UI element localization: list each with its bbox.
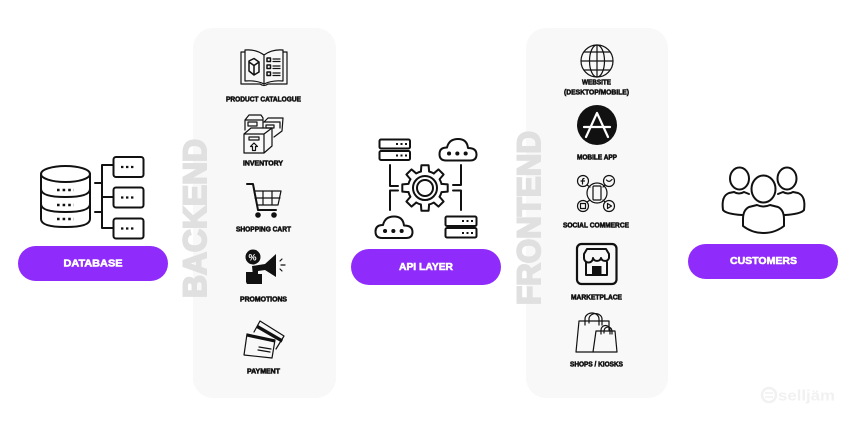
item: shopping cart xyxy=(236,184,292,234)
icon: group of three people xyxy=(723,168,804,233)
button: database: DATABASE xyxy=(64,258,123,270)
logo: selljam watermark: selljäm xyxy=(778,388,835,404)
customers group xyxy=(688,168,838,279)
item: marketplace xyxy=(571,244,622,302)
item: product catalogue xyxy=(226,50,301,104)
button: api layer xyxy=(351,249,501,285)
panel background: backend xyxy=(193,28,336,398)
icon: shopping cart xyxy=(247,184,281,218)
icon: phone with social network badges xyxy=(578,176,614,212)
icon: app store badge xyxy=(577,105,617,145)
button: customers xyxy=(688,244,838,279)
button: api layer: API LAYER xyxy=(399,262,454,273)
item: shops / kiosks xyxy=(570,313,623,368)
label: payment: PAYMENT xyxy=(247,368,281,376)
icon: shopping bags xyxy=(576,313,617,352)
icon: gear with servers and clouds xyxy=(376,139,476,238)
label: shopping cart: SHOPPING CART xyxy=(236,226,292,234)
label: shops / kiosks: SHOPS / KIOSKS xyxy=(570,362,623,368)
panel: backend xyxy=(177,28,336,398)
icon: stacked boxes xyxy=(244,115,283,153)
button: customers: CUSTOMERS xyxy=(730,256,797,267)
icon: central gear xyxy=(402,165,448,211)
panel background: frontend xyxy=(526,28,668,398)
heading: FRONTEND: FRONTEND xyxy=(511,131,547,305)
label: marketplace: MARKETPLACE xyxy=(571,294,622,302)
panel: frontend xyxy=(511,28,668,398)
button: database xyxy=(18,246,168,281)
connector lines xyxy=(390,165,461,210)
label: website: WEBSITE xyxy=(582,80,611,86)
label: promotions: PROMOTIONS xyxy=(240,296,287,304)
label: desktop/mobile: (DESKTOP/MOBILE) xyxy=(564,90,629,96)
icon: open catalogue book xyxy=(241,50,287,86)
item: inventory xyxy=(243,115,283,168)
icon: credit cards xyxy=(244,321,284,358)
api layer group xyxy=(351,139,501,285)
item: mobile app xyxy=(577,105,617,162)
heading: BACKEND: BACKEND xyxy=(177,139,213,298)
icon: cloud top right xyxy=(440,139,476,160)
item: social commerce xyxy=(563,176,629,230)
icon: storefront xyxy=(577,244,616,284)
item: promotions xyxy=(240,250,287,304)
icon: globe xyxy=(581,45,613,77)
icon: server bottom right xyxy=(446,216,476,238)
label: inventory: INVENTORY xyxy=(243,160,283,168)
label: mobile app: MOBILE APP xyxy=(577,154,617,162)
label: social commerce: SOCIAL COMMERCE xyxy=(563,222,629,230)
icon: cloud bottom left xyxy=(376,216,412,238)
logo: selljam watermark xyxy=(762,388,835,404)
item: website xyxy=(564,45,629,96)
item: payment xyxy=(244,321,284,376)
label: product catalogue: PRODUCT CATALOGUE xyxy=(226,96,301,104)
icon: server top left xyxy=(380,140,410,160)
database group xyxy=(18,157,168,281)
icon: database with linked records xyxy=(41,157,144,238)
icon: hand with megaphone and percent badge: % xyxy=(248,252,257,262)
